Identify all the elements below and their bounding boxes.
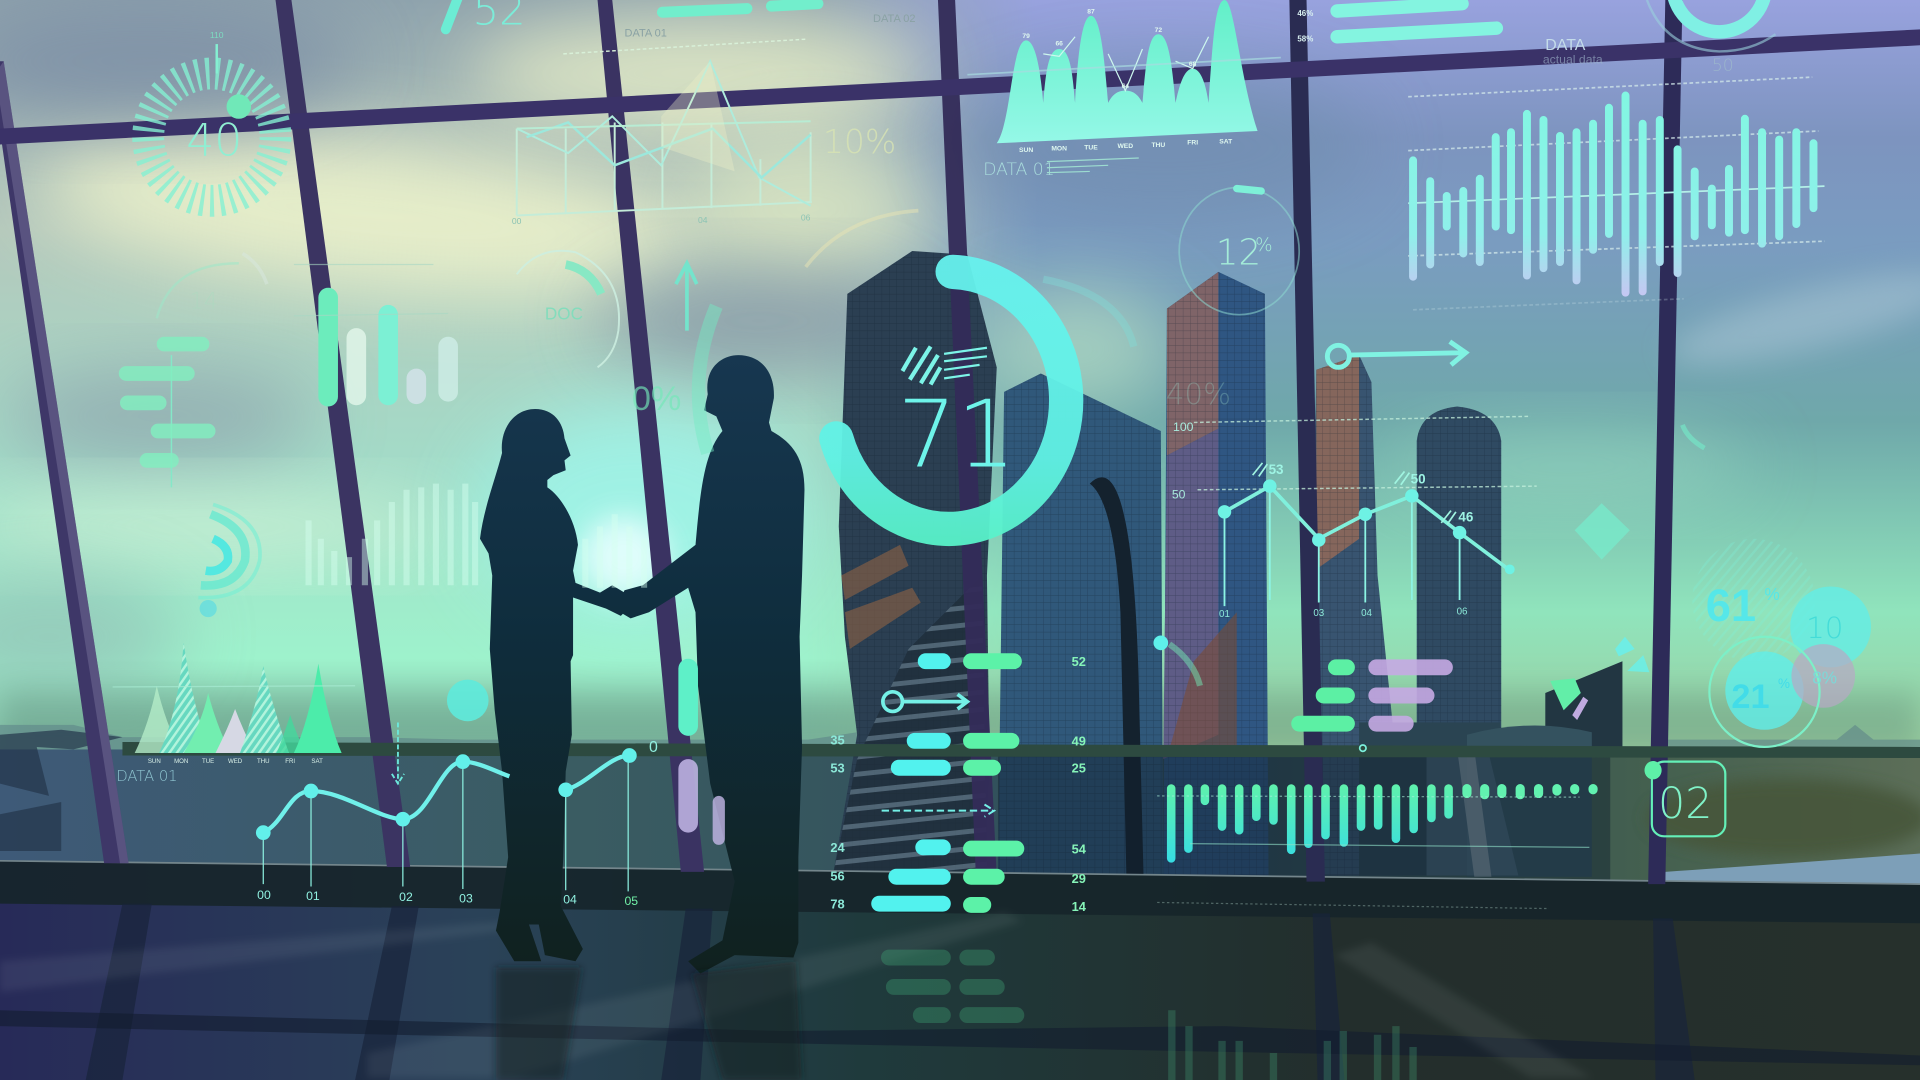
butterfly bar chart centre: 78: [830, 897, 845, 912]
peak area chart top centre: WED: [1117, 143, 1133, 150]
data 01 label lower left: DATA 01: [116, 768, 178, 785]
line chart panel upper centre: [512, 61, 812, 226]
line chart over towers: 06: [1457, 607, 1468, 618]
pills beside man: [688, 669, 719, 839]
peak area chart top centre: 66: [1055, 40, 1063, 47]
forest on the right: [1647, 779, 1920, 857]
butterfly bar chart centre: [830, 654, 1087, 1015]
right green bars: [971, 661, 1016, 905]
small arc accent: [1682, 425, 1704, 448]
silhouette reflections on the floor: [496, 961, 802, 1080]
12 percent circular gauge: %: [1255, 235, 1273, 256]
peak area chart top centre: [967, 0, 1281, 154]
sixth mullion: [1648, 0, 1682, 884]
top hatched number and bars: DATA 02: [873, 13, 916, 25]
view below the horizon: [0, 749, 1920, 884]
circle arrow marker right: [1327, 342, 1466, 367]
waveform reflection: [1172, 1010, 1413, 1080]
peak area chart top centre: TUE: [1084, 144, 1098, 151]
faded 10 percent label: 10%: [823, 122, 896, 161]
peak area chart top centre: 64: [1122, 83, 1129, 90]
value labels: 14: [1072, 899, 1087, 914]
silhouette: woman: [480, 409, 637, 961]
data label top right: DATA: [1545, 37, 1586, 54]
sky background: [0, 0, 1920, 765]
value labels: 25: [1072, 761, 1086, 776]
line chart panel upper centre: 00: [512, 216, 522, 226]
line chart lower left: 03: [459, 891, 473, 905]
bubble percentage cluster: 8%: [1812, 667, 1837, 687]
angled tower: [1308, 355, 1408, 876]
butterfly bar chart centre: 53: [830, 761, 845, 776]
horizon rail: [122, 742, 1920, 758]
second mullion: [276, 0, 410, 867]
faint arc upper right of centre: [806, 211, 918, 267]
line chart lower left: 00: [257, 888, 271, 902]
bubble percentage cluster: 21: [1731, 678, 1770, 716]
value labels: 49: [1072, 734, 1086, 749]
shaded lower part of the buildings: [998, 752, 1610, 882]
data label top right: actual data: [1543, 53, 1603, 67]
distant haze silhouette: [0, 725, 1920, 749]
peaks area chart lower left: MON: [174, 758, 188, 765]
faint 40 percent label: 40%: [1166, 377, 1231, 411]
value labels: 52: [1072, 654, 1086, 669]
bubble percentage cluster: 61: [1706, 580, 1756, 631]
data label top right: [1543, 37, 1603, 67]
twisted tower: [833, 251, 997, 877]
list lines: [944, 348, 987, 378]
fifth mullion: [1289, 0, 1325, 882]
small list bars left: [126, 344, 208, 487]
butterfly bar chart centre: 56: [830, 868, 845, 883]
peak area chart top centre: 79: [1022, 33, 1030, 40]
diamond marker: [1575, 503, 1630, 560]
silhouette: man: [616, 355, 804, 973]
third mullion: [598, 0, 704, 872]
radial dial gauge: 110: [210, 30, 224, 40]
circle arrow: [902, 694, 967, 709]
12 percent circular gauge: 12: [1216, 232, 1261, 273]
peak area chart top centre: 72: [1155, 27, 1162, 34]
line chart over towers: 46: [1458, 510, 1473, 525]
radial dial gauge: 40: [186, 116, 242, 167]
value labels: [1072, 654, 1087, 914]
line chart lower left: 01: [306, 889, 320, 903]
peaks area chart lower left: TUE: [202, 758, 214, 765]
value labels: 54: [1072, 841, 1087, 856]
DOC gauge: DOC: [545, 304, 583, 324]
butterfly bar chart centre: 24: [830, 840, 846, 855]
butterfly bar chart centre: 35: [830, 732, 845, 747]
large donut gauge 71: [836, 272, 1134, 529]
dashed arrow: [882, 804, 994, 817]
top right ring: 50: [1712, 56, 1734, 76]
upper transom: [0, 29, 1920, 144]
peak area chart top centre: SAT: [1219, 138, 1233, 145]
peaks area chart lower left: FRI: [285, 758, 295, 765]
peaks area chart lower left: SAT: [311, 758, 323, 765]
peak area chart top centre: MON: [1051, 146, 1067, 153]
secondary faint arc: [1043, 279, 1134, 347]
green waveform lower right: [1157, 789, 1593, 1080]
faint percent arc: [632, 306, 716, 453]
left cyan bars: [879, 661, 943, 904]
top hatched number and bars: [446, 0, 916, 54]
line chart lower left: 04: [563, 893, 577, 907]
line chart over towers: 50: [1411, 472, 1426, 487]
lone circle: [447, 680, 489, 721]
peak area chart top centre: FRI: [1187, 139, 1198, 146]
radial dial gauge: [148, 30, 276, 201]
peak area chart top centre: 87: [1087, 8, 1095, 15]
gauge arc with 14 label: [157, 253, 267, 318]
hatch mark: [902, 347, 940, 384]
numbered 02 tag: [1644, 761, 1725, 836]
12 percent circular gauge: [1179, 187, 1299, 315]
city skyline beyond the window: [0, 251, 1920, 884]
gauge arc with 14 label: 14: [190, 290, 218, 315]
line chart over towers: 01: [1219, 609, 1230, 620]
top right ring: [1647, 0, 1776, 76]
bubble percentage cluster: %: [1764, 584, 1780, 604]
data 01 label with lines: [983, 158, 1139, 180]
waveform bar chart upper right: [1408, 77, 1824, 310]
value: 71: [898, 381, 1016, 489]
top percent labels: [1297, 9, 1313, 44]
top hatched number and bars: DATA 01: [624, 28, 667, 40]
line chart over towers: [1172, 416, 1537, 620]
line chart over towers: 53: [1269, 462, 1284, 477]
faint vertical bars behind figures: [309, 484, 644, 588]
line chart lower left: 02: [399, 890, 413, 904]
line chart lower left: 05: [624, 894, 638, 908]
DOC gauge: [517, 251, 619, 367]
small buildings on the right: [1545, 661, 1622, 749]
value labels: 29: [1072, 871, 1086, 886]
bubble percentage cluster: [1692, 539, 1871, 747]
top percent labels: 46%: [1297, 9, 1313, 18]
peaks area chart lower left: THU: [257, 758, 270, 765]
spiral gauge: [198, 504, 260, 617]
round tower: [1359, 407, 1501, 876]
main ring: [836, 272, 1066, 529]
line chart lower left: [256, 739, 658, 908]
faint percent arc: 0%: [632, 380, 681, 418]
top percent labels: 58%: [1297, 35, 1313, 44]
rounded bar chart left: [294, 264, 448, 397]
top right bars: [1337, 4, 1496, 37]
peaks area chart lower left: WED: [228, 758, 243, 765]
line chart panel upper centre: 04: [698, 215, 708, 225]
line chart over towers: 100: [1173, 420, 1194, 434]
data 01 label with lines: DATA 01: [983, 160, 1055, 180]
bubble percentage cluster: 10: [1806, 611, 1844, 645]
numbered 02 tag: 02: [1658, 779, 1712, 829]
tall central tower: [1163, 272, 1269, 882]
bubble percentage cluster: %: [1778, 676, 1790, 691]
floor and window sill: [0, 861, 1920, 1080]
peak area chart top centre: SUN: [1019, 147, 1033, 154]
fourth mullion: [938, 0, 997, 877]
line chart panel upper centre: 06: [801, 212, 811, 222]
foliage on the left: [0, 730, 122, 851]
exploded pie fragments: [1550, 637, 1649, 720]
peaks area chart lower left: [113, 643, 355, 765]
line chart over towers: 04: [1361, 608, 1373, 619]
bar reflections: [889, 958, 1016, 1015]
dashed down arrow: [392, 722, 404, 784]
stacked bars over towers: [1299, 667, 1445, 751]
line chart lower left: 0: [649, 739, 658, 756]
peaks area chart lower left: SUN: [148, 758, 161, 765]
river: [1665, 853, 1920, 884]
vertical up arrow: [676, 263, 697, 331]
curved glass building: [998, 373, 1163, 882]
far left mullion: [0, 61, 129, 863]
small cyan dot with arc: [1153, 636, 1200, 686]
peak area chart top centre: THU: [1151, 142, 1165, 149]
line chart over towers: 50: [1172, 487, 1186, 501]
line chart over towers: 03: [1313, 608, 1325, 619]
peak area chart top centre: 68: [1189, 61, 1197, 68]
